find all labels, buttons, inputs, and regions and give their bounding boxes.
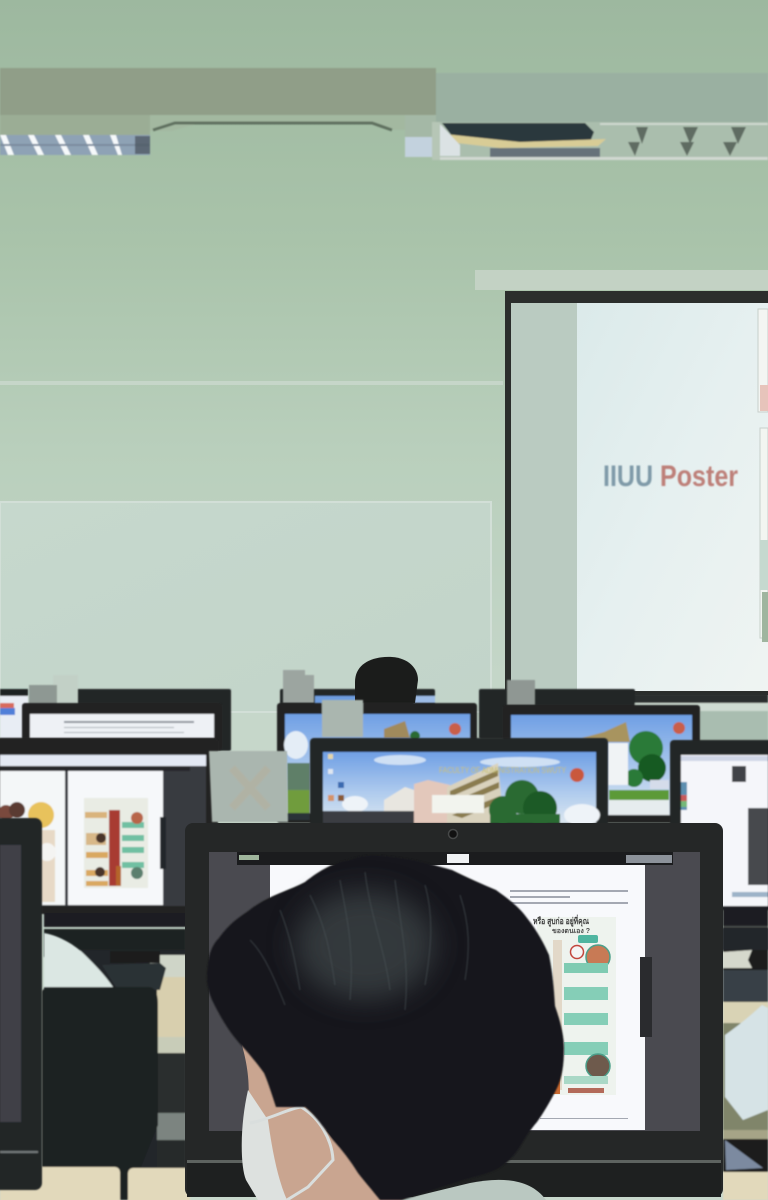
poster on page [533, 914, 616, 1095]
poster on page: ของตนเอง ? [552, 928, 590, 935]
hair highlight [295, 890, 435, 1000]
ceiling beam and light fixtures [0, 68, 768, 160]
grey X card [209, 751, 288, 822]
second row monitor left [22, 703, 222, 751]
blue jeans [725, 1140, 763, 1170]
whiteboard [0, 502, 491, 712]
keyboard [102, 963, 166, 990]
background person head [355, 657, 418, 703]
taskbar [323, 811, 414, 823]
right sleeve [725, 1005, 768, 1120]
projector screen casing [475, 270, 768, 290]
third row monitor left with poster on screen [0, 738, 218, 957]
face mask and strap [242, 1090, 333, 1200]
grey paper cards on monitors [29, 670, 535, 705]
second row monitor right [503, 705, 700, 823]
lower desk left [0, 1167, 120, 1200]
third row monitor centre with campus wallpaper [310, 738, 608, 828]
tree [505, 780, 539, 814]
right ceiling light with reflections [405, 122, 768, 160]
shirt collar [400, 1180, 546, 1200]
wall rail [0, 381, 503, 385]
desks, keyboard and sleeve right [723, 928, 768, 1200]
slide side thumbnails [758, 309, 768, 642]
screen [209, 852, 700, 1131]
document page [270, 865, 645, 1130]
third row monitor centre with campus wallpaper: FACULTY OF ADMINISTRATION SWUTY [439, 766, 567, 775]
desktop icons [328, 754, 344, 801]
back row monitors [0, 689, 768, 751]
webcam [448, 830, 458, 838]
left ceiling light [0, 135, 150, 155]
front main monitor [185, 823, 723, 1197]
third row monitor right with web page [670, 740, 768, 950]
front left monitor [0, 818, 42, 1190]
slide title: IIUU Poster [603, 460, 738, 493]
page scroller [640, 957, 652, 1037]
page text lines [510, 890, 628, 1119]
viewer toolbar [237, 852, 673, 865]
second row monitor centre [277, 700, 477, 823]
projector screen [505, 291, 768, 695]
grey card on monitor [322, 700, 363, 737]
hair strands [250, 872, 468, 1010]
desktop notice [432, 795, 484, 813]
office chair [42, 987, 158, 1200]
poster page left [0, 771, 65, 905]
poster page right [68, 771, 163, 905]
poster on page: หรือ สูบก่อ อยู่ที่คุณ [533, 914, 589, 927]
desks, keyboards and chair left [0, 933, 190, 1200]
wallpaper emblem [570, 768, 584, 782]
lower desk centre [128, 1168, 190, 1200]
student hair from behind [207, 855, 564, 1200]
student neck and ear [237, 1030, 408, 1200]
building [384, 787, 414, 823]
shirt sleeve [44, 933, 113, 987]
